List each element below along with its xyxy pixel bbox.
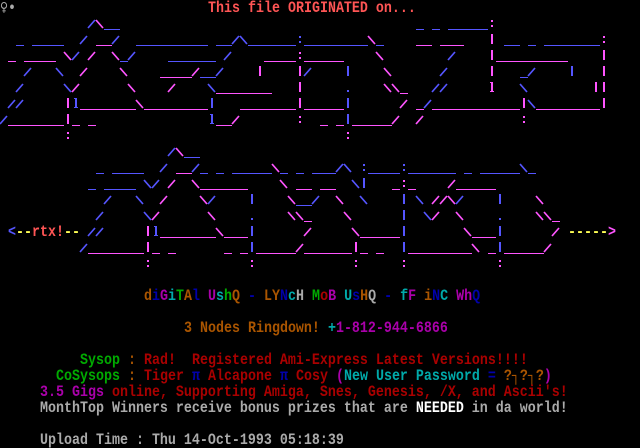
ascii logo: second group name <box>80 148 560 267</box>
cosysops and new user password line: CoSysops : Tiger π Alcapone π Cosy (New User Password = ?┐?┐?) <box>56 368 552 385</box>
monthtop winners line: MonthTop Winners receive bonus prizes that are NEEDED in da world! <box>40 400 568 417</box>
right arrow: -----> <box>568 224 616 241</box>
status icons: female sign and bullet: • <box>8 0 16 17</box>
status icons: female sign and bullet <box>0 0 16 17</box>
group affiliations line: diGiTAl UshQ - LYNcH MoB UsHQ - fF iNC WhQ <box>144 288 480 305</box>
artist tag: rtx left arrow: <--rtx!-- <box>8 224 80 241</box>
heading: file origin: This file ORIGINATED on... <box>208 0 416 17</box>
storage and supported platforms line: 3.5 Gigs online, Supporting Amiga, Snes, Genesis, /X, and Ascii's! <box>40 384 568 401</box>
ascii logo: top BBS name <box>0 20 604 139</box>
sysop line: Sysop : Rad! Registered Ami-Express Latest Versions!!!! <box>80 352 528 369</box>
nodes and phone number: 3 Nodes Ringdown! +1-812-944-6866 <box>184 320 448 337</box>
